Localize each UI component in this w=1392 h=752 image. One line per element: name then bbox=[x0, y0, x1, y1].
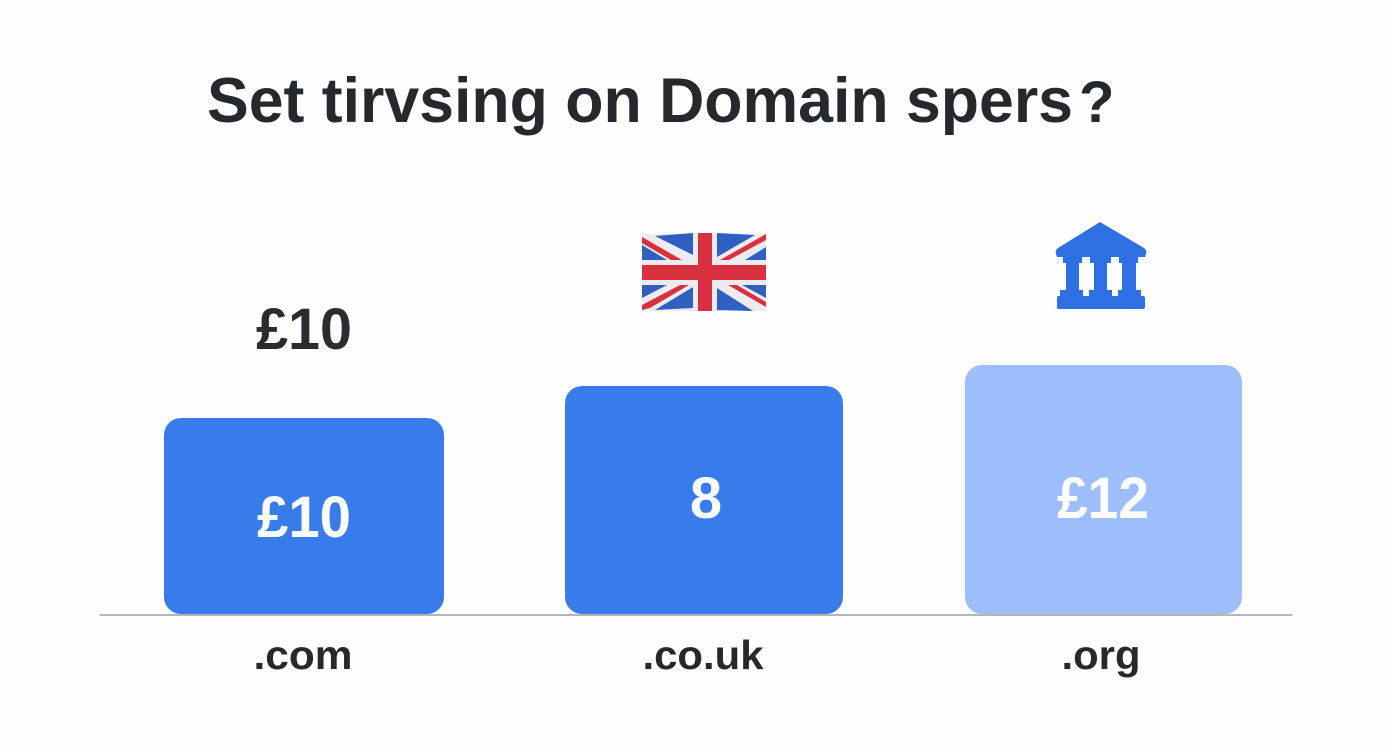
bar value: .co.uk: 8 bbox=[690, 466, 722, 531]
bar value: .org: £12 bbox=[1057, 466, 1149, 531]
bar value: .com: £10 bbox=[257, 485, 351, 550]
bar: .com bbox=[164, 418, 444, 614]
icon: UK flag bbox=[642, 233, 766, 311]
bar: .co.uk bbox=[565, 386, 843, 614]
icon: institution building bbox=[1056, 222, 1146, 309]
axis label: .com: .com bbox=[254, 632, 352, 678]
title: Set tirvsing on Domain spers bbox=[207, 66, 1073, 136]
price label above .com bar: £10 bbox=[256, 297, 352, 362]
chart baseline bbox=[100, 614, 1292, 616]
title: ? bbox=[1079, 70, 1114, 135]
axis label: .co.uk: .co.uk bbox=[642, 632, 764, 678]
bar: .org bbox=[965, 365, 1242, 614]
axis label: .org: .org bbox=[1062, 632, 1140, 678]
